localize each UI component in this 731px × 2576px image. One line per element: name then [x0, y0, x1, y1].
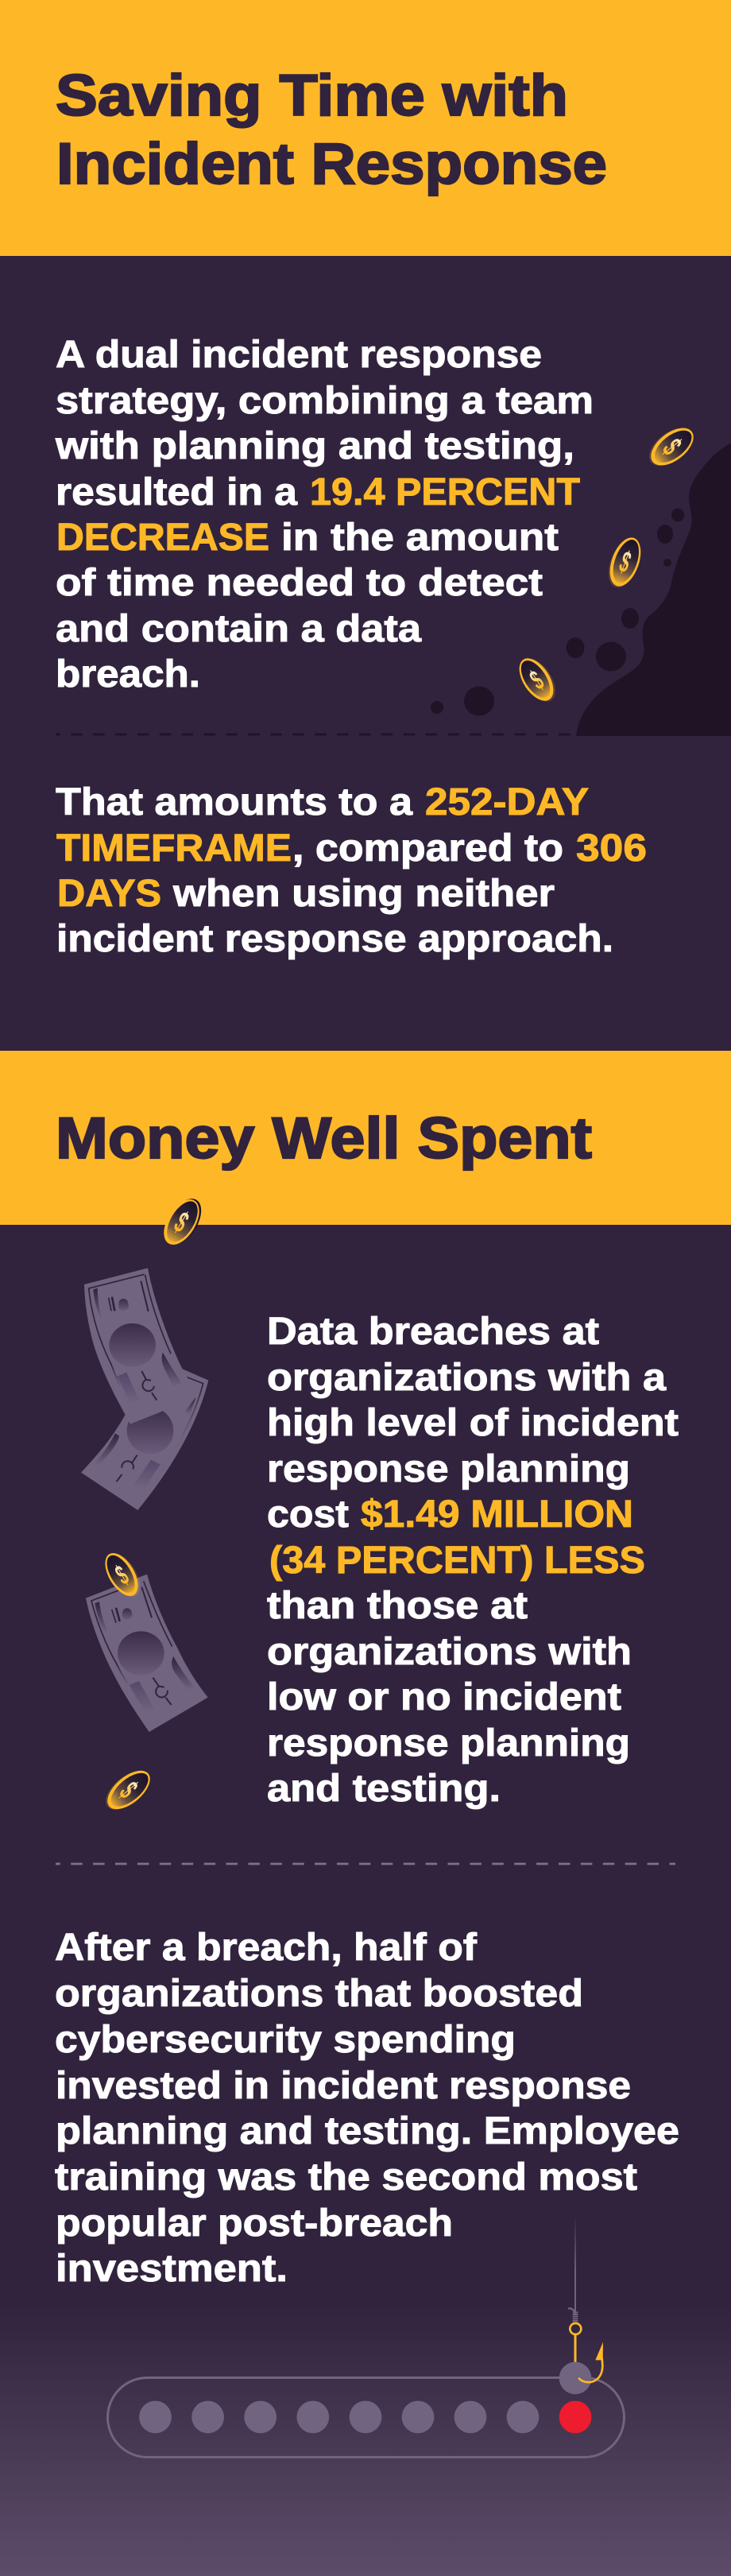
text block: timeframe comparison: That amounts to a [56, 781, 412, 823]
text block: cost of data breaches: than those at [267, 1585, 528, 1627]
text block: timeframe comparison: incident response approach. [56, 918, 613, 960]
text block: cost of data breaches: organizations with [267, 1631, 632, 1673]
text block: post-breach investment [55, 1927, 679, 2290]
illustration: dark blob with holes [431, 443, 731, 736]
text block: cost of data breaches: and testing. [267, 1768, 501, 1810]
text block: post-breach investment: After a breach, half of [55, 1927, 478, 1969]
icon: coin 3 [512, 652, 563, 708]
red password dot [559, 2401, 591, 2433]
icon: coin 1 [643, 420, 700, 474]
banknote: lower [81, 1369, 208, 1510]
icon: coin on header edge: $ [168, 1205, 195, 1239]
text block: cost of data breaches: Data breaches at [267, 1311, 599, 1353]
text block: detection time decrease: and contain a data [56, 608, 421, 650]
fishing hook [559, 2215, 603, 2394]
text block: detection time decrease: strategy, combining a team [56, 380, 594, 422]
text block: detection time decrease: DECREASE [56, 517, 269, 559]
text block: cost of data breaches: (34 PERCENT) LESS [269, 1540, 645, 1582]
text block: detection time decrease: of time needed to detect [56, 562, 543, 604]
banknote: upper [84, 1268, 195, 1424]
text block: detection time decrease [55, 334, 594, 695]
icon: coin on header edge [157, 1192, 208, 1251]
text block: cost of data breaches [267, 1311, 679, 1810]
title: money well spent: Money Well Spent [56, 1106, 592, 1171]
panel: money well spent header [0, 1051, 731, 1225]
illustration: password pill with fishing hook [108, 2215, 625, 2458]
text block: cost of data breaches: high level of incident [267, 1402, 679, 1444]
illustration: falling banknotes pair [81, 1268, 208, 1510]
text block: detection time decrease: A dual incident response [56, 334, 542, 376]
title: saving time with incident response: Saving Time with [56, 64, 568, 128]
text block: cost of data breaches: response planning [267, 1448, 630, 1490]
text block: timeframe comparison: 306 [576, 827, 647, 870]
text block: cost of data breaches: $1.49 MILLION [361, 1493, 633, 1536]
icon: coin 1: $ [656, 432, 689, 461]
text block: timeframe comparison: , compared to [292, 827, 563, 870]
password dots [139, 2401, 539, 2433]
text block: timeframe comparison: DAYS [57, 873, 161, 915]
text block: post-breach investment: investment. [56, 2248, 288, 2290]
text block: post-breach investment: organizations that boosted [55, 1973, 583, 2015]
text block: cost of data breaches: cost [267, 1493, 349, 1536]
icon: coin below banknote: $ [113, 1776, 144, 1804]
divider: lower dashed line [56, 1863, 675, 1865]
text block: detection time decrease: resulted in a [56, 471, 297, 513]
divider: upper dashed line [56, 734, 570, 735]
text block: timeframe comparison: 252-DAY [425, 781, 589, 823]
text block: detection time decrease: in the amount [281, 517, 559, 559]
text block: detection time decrease: breach. [56, 653, 200, 695]
icon: coin 3: $ [525, 665, 549, 696]
password field outline [108, 2378, 625, 2458]
text block: post-breach investment: popular post-breach [56, 2202, 453, 2245]
icon: coin 2 [602, 533, 647, 592]
text block: timeframe comparison: when using neither [172, 873, 555, 915]
icon: coin above banknote: $ [110, 1560, 134, 1591]
text block: post-breach investment: planning and testing. Employee [56, 2110, 679, 2152]
text block: post-breach investment: invested in incident response [56, 2065, 631, 2107]
text block: detection time decrease: 19.4 PERCENT [310, 471, 580, 513]
panel: saving time header [0, 0, 731, 256]
text block: cost of data breaches: low or no incident [267, 1676, 621, 1718]
illustration: falling banknote single [86, 1575, 208, 1732]
text block: timeframe comparison: TIMEFRAME [56, 827, 292, 870]
icon: coin below banknote [99, 1763, 157, 1818]
title: saving time with incident response: Incident Response [56, 132, 607, 196]
icon: coin 2: $ [615, 545, 635, 579]
text block: detection time decrease: with planning and testing, [55, 425, 574, 467]
text block: cost of data breaches: response planning [267, 1722, 630, 1764]
text block: timeframe comparison [56, 781, 647, 960]
text block: post-breach investment: cybersecurity spending [55, 2019, 516, 2061]
title: saving time with incident response [56, 64, 607, 196]
text block: cost of data breaches: organizations with a [267, 1357, 666, 1399]
icon: coin above banknote [99, 1547, 146, 1603]
text block: post-breach investment: training was the second most [55, 2156, 637, 2198]
